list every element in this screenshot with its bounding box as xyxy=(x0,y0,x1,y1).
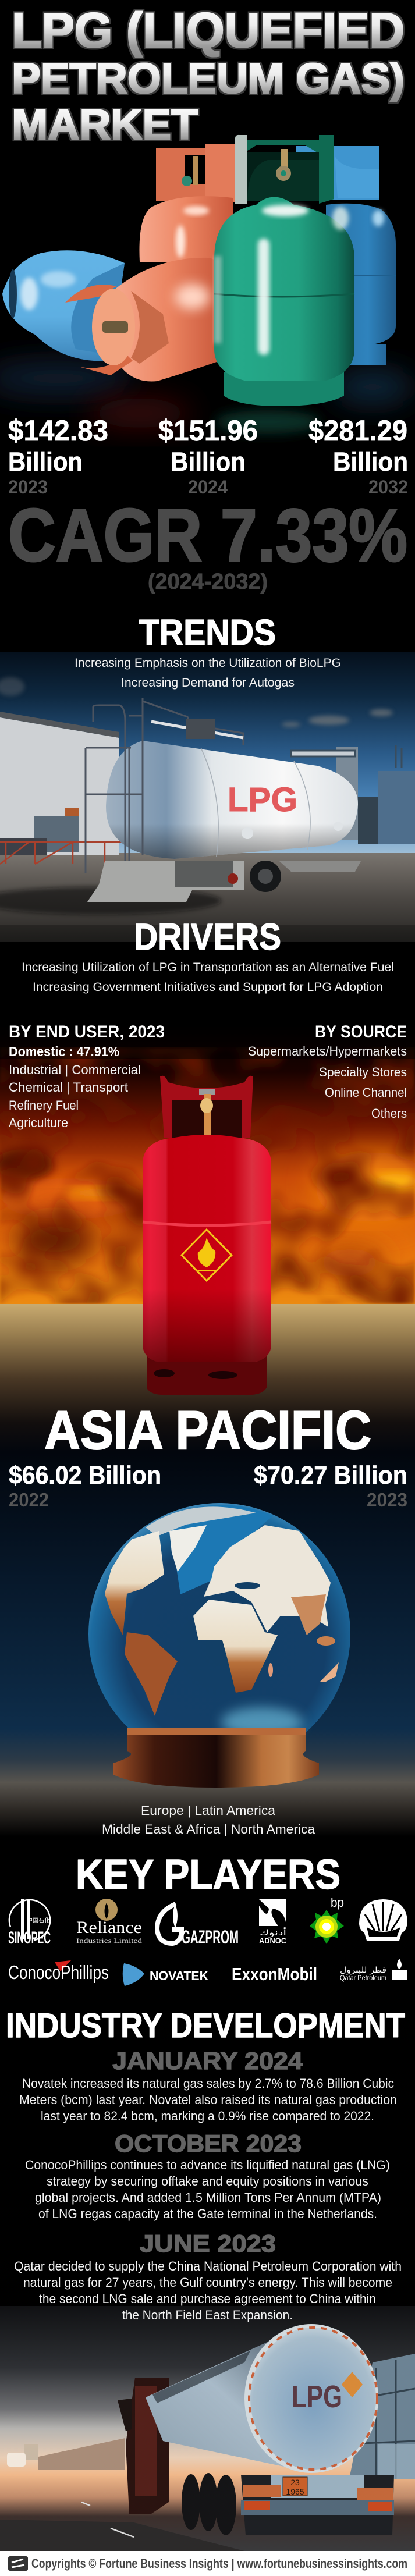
bottom image: LPG tanker truck xyxy=(0,2306,415,2551)
hazard plate: 23 xyxy=(290,2478,300,2487)
tank LPG lettering: LPG xyxy=(228,781,297,819)
drivers text xyxy=(22,961,394,994)
market value 2023: Billion xyxy=(8,447,83,477)
tank xyxy=(106,741,358,859)
by end user segment: Agriculture xyxy=(9,1115,68,1130)
fire background xyxy=(0,1024,415,1304)
development: January 2024: JANUARY 2024 xyxy=(112,2047,303,2074)
market value 2024: 2024 xyxy=(188,477,228,498)
by source segment xyxy=(248,1022,407,1121)
other regions text xyxy=(102,1803,315,1836)
cylinder body xyxy=(143,1135,271,1362)
logo: Sinopec: 中国石化 xyxy=(27,1917,50,1924)
floor reflections xyxy=(0,361,413,434)
development: June 2023: the second LNG sale and purchase agreement to China within xyxy=(39,2291,376,2306)
hazard plate: 1965 xyxy=(286,2487,304,2496)
development: June 2023 xyxy=(14,2230,402,2322)
by source segment: Supermarkets/Hypermarkets xyxy=(248,1044,407,1058)
table surface below fire xyxy=(0,1304,415,1452)
Asia Pacific value 2023 xyxy=(254,1461,407,1511)
market value 2024: Billion xyxy=(171,447,246,477)
logo: ADNOC: ADNOC xyxy=(259,1936,286,1945)
Asia Pacific value 2022 xyxy=(9,1461,161,1511)
logo: Novatek: NOVATEK xyxy=(150,1969,208,1983)
logo: Qatar Petroleum xyxy=(340,1959,407,1982)
market value 2024 xyxy=(158,414,258,498)
title xyxy=(12,3,405,148)
development: January 2024 xyxy=(19,2047,397,2123)
trailer xyxy=(0,861,361,915)
CAGR period: (2024-2032) xyxy=(148,570,268,594)
logo: Qatar Petroleum: قطر للبترول xyxy=(340,1966,386,1975)
flammable diamond label xyxy=(182,1230,232,1281)
logo: Novatek xyxy=(123,1963,208,1986)
hero: LPG cylinders illustration xyxy=(0,135,413,434)
tanker rear bumper xyxy=(241,2475,394,2535)
by end user segment: BY END USER, 2023 xyxy=(9,1022,165,1042)
development: January 2024: Novatek increased its natural gas sales by 2.7% to 78.6 Billion Cubic xyxy=(22,2076,394,2091)
Asia Pacific value 2022: $66.02 Billion xyxy=(9,1461,161,1490)
development: June 2023: natural gas for 27 years, the Gulf country's energy. This will become xyxy=(23,2275,392,2290)
globe xyxy=(88,1503,350,1765)
warehouse xyxy=(0,712,122,864)
by end user segment: Industrial | Commercial xyxy=(9,1063,141,1077)
title: PETROLEUM GAS) xyxy=(12,55,405,102)
development: January 2024: Meters (bcm) last year. Novatel also raised its natural gas production xyxy=(19,2092,397,2107)
logo: bp: bp xyxy=(331,1895,344,1910)
development: October 2023 xyxy=(25,2130,390,2221)
truck wheels xyxy=(182,2473,236,2535)
market value 2023: 2023 xyxy=(8,477,48,498)
distant vehicles xyxy=(7,2438,125,2470)
title: MARKET xyxy=(12,101,198,148)
blue standing cylinder xyxy=(296,146,396,365)
clouds xyxy=(0,677,393,727)
drivers text: Increasing Utilization of LPG in Transportation as an Alternative Fuel xyxy=(22,961,394,974)
by end user segment: Domestic : 47.91% xyxy=(9,1044,119,1059)
truck cab xyxy=(118,2378,169,2514)
LPG marking: LPG xyxy=(292,2379,342,2414)
logo: Sinopec: SINOPEC xyxy=(8,1928,51,1948)
wooden stand xyxy=(113,1728,319,1788)
by source segment: Specialty Stores xyxy=(319,1065,407,1079)
green cylinder xyxy=(214,135,354,406)
heading: drivers: DRIVERS xyxy=(134,916,281,958)
company logos xyxy=(3,1894,407,1986)
cylinder foot xyxy=(147,1353,267,1395)
tanker end xyxy=(244,2324,378,2473)
barrel highlight band xyxy=(152,2351,250,2403)
foot holes xyxy=(154,1369,237,1379)
development: October 2023: ConocoPhillips continues to advance its liquified natural gas (LNG) xyxy=(25,2158,390,2172)
development: January 2024: last year to 82.4 bcm, marking a 0.9% rise compared to 2022. xyxy=(41,2109,374,2123)
icon: Fortune Business Insights logo xyxy=(8,2556,28,2571)
market value 2024: $151.96 xyxy=(158,414,258,447)
title: LPG (LIQUEFIED xyxy=(12,3,405,58)
red LPG cylinder xyxy=(143,1076,271,1395)
market value 2032: 2032 xyxy=(368,477,408,498)
development: October 2023: global projects. And added 1.5 Million Tons Per Annum (MTPA) xyxy=(35,2190,381,2205)
development: October 2023: of LNG regas capacity at the Gate terminal in the Netherlands. xyxy=(38,2207,377,2221)
logo: Gazprom: GAZPROM xyxy=(182,1927,239,1948)
footer xyxy=(0,2551,415,2576)
logo: Reliance: Reliance xyxy=(76,1918,142,1937)
by end user segment xyxy=(9,1022,165,1130)
development: June 2023: the North Field East Expansion. xyxy=(122,2308,293,2322)
logo: bp xyxy=(310,1895,344,1944)
other regions text: Europe | Latin America xyxy=(141,1803,276,1818)
by source segment: Online Channel xyxy=(325,1085,407,1100)
by source segment: Others xyxy=(371,1106,407,1121)
by end user segment: Chemical | Transport xyxy=(9,1080,128,1095)
development: June 2023: Qatar decided to supply the China National Petroleum Corporation with xyxy=(14,2259,402,2273)
heading: Asia Pacific: ASIA PACIFIC xyxy=(44,1399,371,1461)
development: June 2023: JUNE 2023 xyxy=(140,2230,276,2257)
trends text: Increasing Emphasis on the Utilization of BioLPG xyxy=(75,656,341,670)
blue lying cylinder xyxy=(2,250,125,361)
orange lying cylinder xyxy=(65,258,220,382)
market value 2023: $142.83 xyxy=(8,414,108,447)
regional backdrop xyxy=(0,1452,415,1836)
development: October 2023: OCTOBER 2023 xyxy=(115,2130,302,2157)
refinery xyxy=(291,745,415,844)
logo: Qatar Petroleum: Qatar Petroleum xyxy=(340,1974,386,1982)
logo: Reliance: Industries Limited xyxy=(76,1937,142,1945)
Asia Pacific value 2023: $70.27 Billion xyxy=(254,1461,407,1490)
logo: Sinopec xyxy=(3,1894,56,1948)
ladder and railings xyxy=(86,698,243,873)
heading: trends: TRENDS xyxy=(139,613,276,653)
market value 2032: $281.29 xyxy=(308,414,407,447)
logo: ConocoPhillips: ConocoPhillips xyxy=(8,1962,109,1983)
tanker barrel xyxy=(146,2325,314,2473)
logo: ADNOC xyxy=(259,1899,286,1945)
noise barrier xyxy=(349,2354,415,2479)
cylinder handle xyxy=(160,1076,253,1138)
Asia Pacific value 2022: 2022 xyxy=(9,1489,49,1511)
Asia Pacific value 2023: 2023 xyxy=(367,1489,407,1511)
logo: Reliance xyxy=(76,1899,142,1945)
logo: ExxonMobil: ExxonMobil xyxy=(232,1964,317,1984)
hazard plate xyxy=(283,2477,307,2496)
logo: Gazprom xyxy=(157,1904,239,1948)
other regions text: Middle East & Africa | North America xyxy=(102,1822,315,1836)
globe on wooden stand xyxy=(88,1503,350,1788)
market value 2023 xyxy=(8,414,108,498)
road xyxy=(0,2520,244,2551)
logo: Shell xyxy=(359,1899,407,1941)
market value 2032 xyxy=(308,414,408,498)
orange standing cylinder xyxy=(139,144,235,262)
trends text xyxy=(75,656,341,690)
logo: ADNOC: أدنوك xyxy=(260,1927,286,1938)
trends text: Increasing Demand for Autogas xyxy=(121,676,295,690)
trends image: LPG storage tank xyxy=(0,652,415,942)
by end user segment: Refinery Fuel xyxy=(9,1098,79,1113)
market value 2032: Billion xyxy=(333,447,408,477)
drivers text: Increasing Government Initiatives and Support for LPG Adoption xyxy=(33,980,383,994)
development: October 2023: strategy by securing offtake and equity positions in various xyxy=(47,2174,368,2188)
heading: key players: KEY PLAYERS xyxy=(76,1852,340,1898)
